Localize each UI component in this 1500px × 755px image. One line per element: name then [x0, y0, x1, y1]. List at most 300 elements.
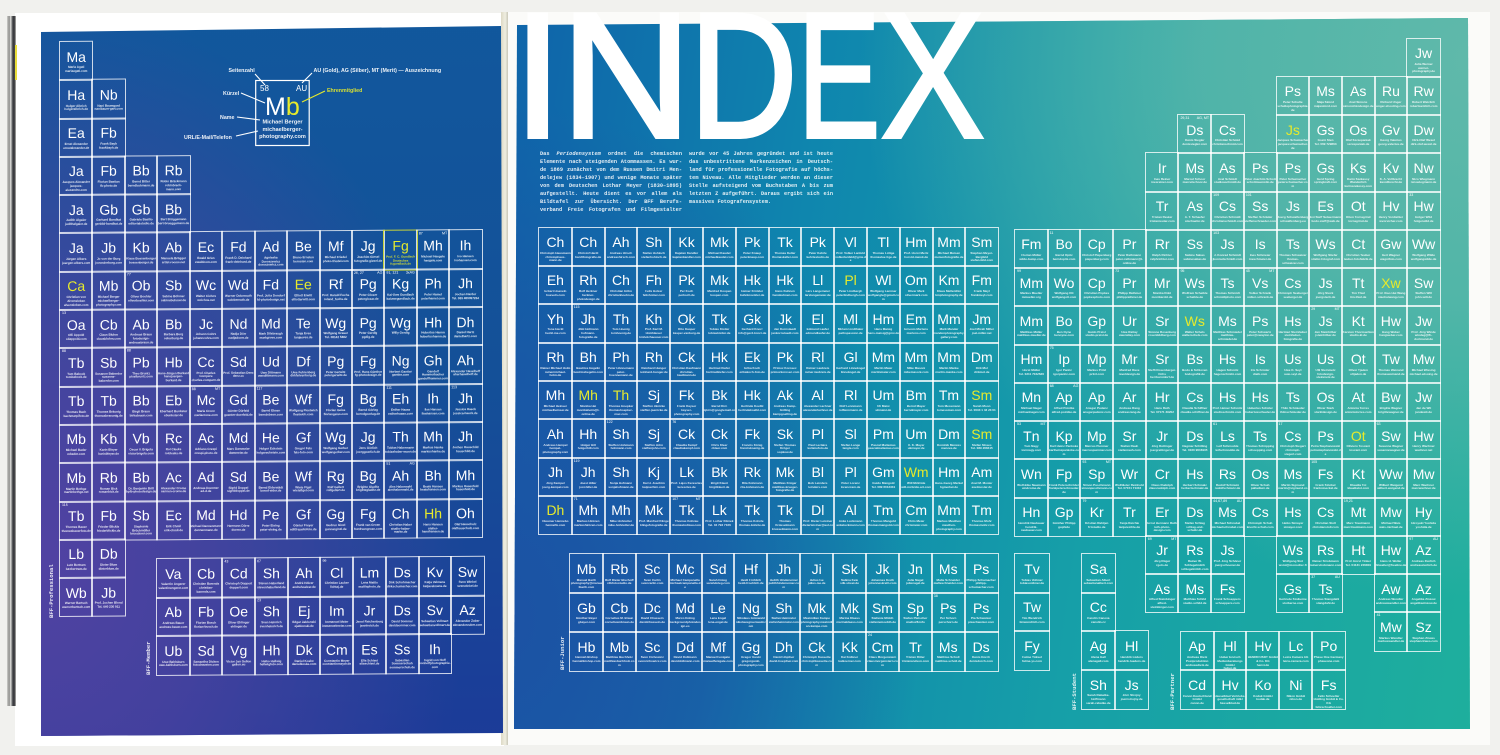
- panel: centre table: kmholzhaeuser.com: [639, 335, 668, 339]
- panel: right page table: Bo: [1055, 236, 1073, 252]
- panel: BFF-Professional table, left page: wdobernuth.de: [227, 298, 249, 302]
- panel: BFF-Professional table, left page: thomasbraeunig.de: [94, 413, 122, 418]
- panel: right page table: Peter Schulte: [1283, 100, 1303, 104]
- panel: BFF-Professional table, left page: Bernd Bitter: [132, 180, 149, 184]
- panel: centre table: Joel Micah Miller: [970, 327, 994, 331]
- legend: how to read a cell: URL/E-Mail/Telefon: [184, 135, 232, 141]
- panel: BFF-Professional table, left page: Ah: [392, 467, 409, 483]
- panel: centre table: joel-miller.net: [972, 331, 992, 335]
- panel: right page table: joergrettinger.de: [1150, 448, 1174, 452]
- panel: centre table: 122: [607, 420, 613, 424]
- panel: BFF-Member table: Ds: [393, 564, 410, 580]
- panel: BFF-Professional table, left page: Jh: [458, 275, 472, 292]
- panel: BFF-Professional table, left page: oliverboehler.com: [128, 298, 154, 302]
- panel: BFF-Member table: Daniel Koske: [294, 659, 313, 663]
- panel: BFF-Professional table, left page: Hans Hansen: [423, 522, 442, 526]
- panel: right page table: Sr: [1122, 428, 1136, 444]
- panel: BFF-Member table: 23: [257, 598, 261, 602]
- panel: centre table: Thomas Koltzau: [675, 519, 698, 523]
- panel: BFF-Professional table, left page: Rb: [164, 163, 182, 179]
- panel: centre table: 107: [672, 497, 678, 501]
- panel: centre table: Wolfgang Lammer: [870, 289, 897, 293]
- panel: right page table: Rainer Strobmann: [1312, 559, 1339, 563]
- panel: BFF-Member table: fotodrausten.com: [193, 663, 219, 667]
- panel: BFF-Professional table, left page: doroszewicz.com: [258, 263, 283, 267]
- panel: right page table: yoshida.de: [1416, 525, 1432, 529]
- panel: BFF-Junior table: Sh: [775, 600, 792, 616]
- legend: how to read a cell: 58: [260, 84, 269, 93]
- panel: BFF-Professional table, left page: charles-compere.de: [191, 378, 220, 382]
- panel: BFF-Member table: 99: [322, 559, 326, 563]
- panel: right page table: Volker Schrank: [1249, 291, 1271, 295]
- panel: BFF-Professional table, left page: Bg: [359, 468, 376, 484]
- panel: right page table: Iris Schröder: [1251, 368, 1270, 372]
- panel: BFF-Member table: Immanuel Meier: [325, 620, 348, 624]
- panel: right page table: Vs: [1252, 274, 1268, 290]
- cell: Js honorary member: Js: [1286, 122, 1300, 138]
- panel: BFF-Professional table, left page: jovonderburg.com: [95, 260, 122, 264]
- panel: right page table: wvorsicher.com: [1379, 219, 1402, 223]
- panel: right page table: 97: [1409, 537, 1413, 541]
- panel: right page table: jkonradschmidt.com: [1213, 257, 1242, 261]
- panel: BFF-Professional table, left page: rolfgellert.de: [326, 488, 344, 492]
- panel: right page table: Ru: [1382, 83, 1400, 99]
- panel: right page table: Cs: [1219, 122, 1236, 138]
- panel: right page table: petrastephanowski.de: [1310, 448, 1341, 456]
- yellow edge tab: [15, 45, 17, 80]
- panel: right page table: Christoph Seeberger: [1278, 291, 1308, 295]
- panel: centre table: holgerhill.com: [578, 446, 599, 450]
- panel: right page table: Fs: [1318, 466, 1333, 482]
- panel: right page table: 93: [1082, 460, 1086, 464]
- panel: centre table: Thomas Mangold: [871, 519, 896, 523]
- cell: Ca honorary member: [59, 270, 93, 311]
- panel: centre table: Jh: [581, 464, 596, 480]
- panel: BFF-Junior table: Philipp Schumacher: [966, 578, 996, 582]
- panel: right page table: dieib.com: [1253, 372, 1267, 376]
- panel: BFF-Member table: Lena Mattis: [361, 581, 378, 585]
- panel: centre table: lorenzcam.de: [841, 485, 860, 489]
- panel: centre table: 76: [672, 420, 676, 424]
- panel: BFF-Junior table: Christoph Kassette: [803, 655, 831, 659]
- panel: centre table: Klaus Mellenthin: [937, 289, 961, 293]
- panel: BFF-Professional table, left page: Rb: [99, 469, 117, 485]
- panel: centre table: Sl: [844, 426, 857, 442]
- panel: centre table: jankornstaedt.com: [771, 331, 799, 335]
- panel: right page table: Wo: [1054, 274, 1074, 290]
- panel: centre table: Thomas Lüttge: [872, 251, 894, 255]
- panel: BFF-Professional table, left page: 87: [418, 232, 422, 236]
- panel: right page table: stiefer-fotograf.com: [1311, 257, 1340, 261]
- panel: right page table: claudia-schiffner.de: [1180, 410, 1209, 414]
- panel: BFF-Junior table: Mk: [807, 600, 826, 616]
- panel: BFF-Student table: Sa: [1090, 561, 1107, 577]
- panel: right page table: andreaswendler.com: [1376, 601, 1406, 605]
- panel: BFF-Professional table, left page: Ja: [68, 163, 83, 179]
- panel: right page table: Ot: [1351, 351, 1366, 367]
- panel: BFF-Partner table: henvi.de: [1257, 663, 1269, 667]
- panel: BFF-Professional table, left page: Theo Bruntz: [132, 371, 149, 375]
- panel: BFF-Professional table, left page: Wg: [325, 429, 346, 446]
- panel: right page table: tornagrind.de: [1348, 219, 1368, 223]
- panel: BFF-Professional table, left page: Ec: [197, 239, 214, 255]
- panel: BFF-Member table: Florian Busch: [196, 621, 216, 625]
- panel: BFF-Junior table: Maximilian Kampe: [803, 616, 830, 620]
- panel: BFF-Professional table, left page: juergen-albers.com: [62, 260, 90, 265]
- panel: centre table: Gk: [743, 311, 761, 327]
- panel: centre table: erikakoch-foto.de: [739, 370, 765, 374]
- panel: right page table: marctrautmann.com: [1344, 525, 1373, 529]
- legend: how to read a cell: Kürzel: [223, 91, 240, 97]
- panel: BFF-Professional table, left page: wolfgangerber.com: [321, 450, 349, 454]
- intro text: column two: massives Fotografensystem.: [689, 199, 771, 205]
- panel: right page table: Igor Panitz: [1056, 368, 1072, 372]
- panel: BFF-Professional table, left page: Frank van Groen: [356, 523, 380, 527]
- panel: right page table: walterschels.com: [1182, 333, 1207, 337]
- panel: right page table: MT: [1335, 307, 1340, 311]
- panel: right page table: georg-valerius.de: [1378, 142, 1404, 146]
- panel: centre table: Dm: [938, 426, 960, 442]
- panel: BFF-Professional table, left page: markgrove.com: [259, 336, 282, 340]
- panel: BFF-Junior table: Ck: [808, 639, 825, 655]
- panel: BFF-Professional table, left page: Wd: [227, 277, 248, 293]
- cell: Ma: mariaagati.com: [65, 69, 87, 73]
- panel: right page table: Goetz Sten: [1318, 138, 1333, 142]
- panel: BFF-Professional table, left page: Prof. Sebastian Denz: [223, 370, 253, 375]
- intro text: column one: verband Freie Fotografen und Filmgestalter: [540, 207, 682, 213]
- panel: right page table: Ds: [1186, 122, 1203, 138]
- panel: BFF-Junior table: perschorn.de: [939, 620, 958, 624]
- panel: small left column table: fatme-ys.com: [1022, 659, 1042, 663]
- panel: BFF-Junior table: Matthias Buchholz: [606, 655, 633, 659]
- panel: centre table: Hm: [905, 234, 927, 250]
- panel: right page table: Cr: [1155, 466, 1169, 482]
- panel: BFF-Professional table, left page: Rg: [326, 468, 344, 484]
- panel: BFF-Professional table, left page: Ad: [262, 238, 279, 255]
- panel: BFF-Junior table: gregorguski-photography.com: [738, 659, 764, 667]
- panel: centre table: Mh: [578, 387, 598, 403]
- panel: BFF-Member table: Katja Velmans: [424, 580, 445, 584]
- panel: right page table: Peter Schumacher: [1279, 177, 1306, 181]
- page: left white sheet: [15, 13, 504, 746]
- panel: centre table: Peter Kehrle: [809, 251, 827, 255]
- panel: right page table: Ws: [1185, 313, 1205, 329]
- panel: centre table: Bk: [711, 387, 728, 403]
- panel: right page table: AU: [1433, 537, 1438, 541]
- panel: BFF-Professional table, left page: judithalgaier.de: [65, 222, 87, 226]
- panel: BFF-Partner table: Hv: [1221, 677, 1239, 693]
- label: BFF-Partner: BFF-Partner: [1169, 673, 1176, 710]
- panel: BFF-Partner table: Cd: [1188, 677, 1206, 693]
- panel: BFF-Professional table, left page: Prof. Hans Günther: [354, 369, 382, 374]
- label: BFF-Junior: BFF-Junior: [559, 636, 566, 670]
- panel: right page table: Karin Székessy: [1347, 177, 1369, 181]
- panel: right page table: angelikazinzow.de: [1410, 601, 1437, 605]
- panel: right page table: Stefan Schlag: [1185, 521, 1205, 525]
- panel: right page table: Wolfgang Stol: [1283, 559, 1303, 563]
- panel: BFF-Partner table: Po: [1320, 638, 1337, 654]
- panel: BFF-Professional table, left page: Ab: [164, 239, 182, 255]
- panel: right page table: Hw: [1413, 198, 1434, 214]
- panel: centre table: Hm: [938, 464, 960, 480]
- panel: centre table: hgmerkel.de: [940, 485, 958, 489]
- panel: BFF-Professional table, left page: photo-friedel.com: [322, 259, 348, 263]
- panel: right page table: 44,67,89: [1213, 498, 1227, 502]
- legend: how to read a cell: Michael Berger: [262, 120, 303, 126]
- panel: centre table: Mk: [710, 272, 729, 288]
- panel: centre table: ulimaisi.de: [875, 408, 891, 412]
- panel: right page table: Tom Nagy: [1024, 444, 1039, 448]
- panel: right page table: szczepaniak.de: [1347, 142, 1369, 146]
- panel: right page table: Prof. Heiner Schmitz: [1213, 406, 1242, 410]
- panel: BFF-Professional table, left page: Michael Haegele: [421, 254, 444, 258]
- panel: BFF-Professional table, left page: hauschild.de: [456, 449, 474, 453]
- panel: BFF-Professional table, left page: 117: [256, 386, 262, 390]
- panel: BFF-Member table: [156, 556, 485, 676]
- panel: centre table: Rk: [744, 464, 761, 480]
- panel: centre table: Andreas Hempel: [543, 443, 567, 447]
- panel: BFF-Professional table, left page: 115: [62, 503, 67, 507]
- panel: right page table: Steffen Schräder: [1248, 215, 1272, 219]
- panel: right page table: 29: [1311, 307, 1315, 311]
- panel: right page table: Sp: [1088, 466, 1105, 482]
- panel: right page table: Dagmar Schilling: [1182, 444, 1207, 448]
- panel: right page table: tomnagy.com: [1022, 448, 1041, 452]
- panel: BFF-Professional table, left page: ivohansen.com: [454, 258, 476, 262]
- panel: BFF-Professional table, left page: berndgoerlag.de: [356, 412, 380, 416]
- panel: BFF-Junior table: Judith Hinderunner: [770, 578, 798, 582]
- panel: centre table: Christoph Hausmann: [540, 251, 571, 255]
- panel: centre table: Stefan Moses: [972, 443, 992, 447]
- panel: right page table: frankstoeckel.de: [1314, 486, 1338, 490]
- panel: BFF-Professional table, left page: Ac: [197, 430, 214, 447]
- panel: right page table: matthias-mueller.de: [1017, 333, 1046, 337]
- panel: BFF-Professional table, left page: Ob: [131, 278, 150, 294]
- panel: right page table: Cs: [1186, 389, 1203, 405]
- panel: right page table: Walter Schels: [1185, 330, 1205, 334]
- panel: centre table: Mm: [937, 349, 961, 365]
- panel: right page table: Mm: [1020, 313, 1043, 329]
- panel: right page table: Claus Rudolph: [1151, 483, 1173, 487]
- panel: BFF-Member table: Ej: [298, 603, 310, 619]
- panel: centre table: hoeveln.com: [546, 293, 565, 297]
- panel: BFF-Junior table: Mb: [577, 561, 596, 577]
- panel: BFF-Professional table, left page: fd-photodesign.net: [257, 297, 284, 301]
- panel: right page table: majasimnd.com: [1314, 104, 1337, 108]
- panel: centre table: larslangemeier.de: [805, 293, 831, 297]
- panel: centre table: Bh: [580, 349, 597, 365]
- panel: centre table: Ek: [744, 349, 760, 365]
- panel: centre table: koopen.com: [710, 293, 728, 297]
- panel: right page table: Tw: [1382, 351, 1400, 367]
- panel: right page table: Bw: [1381, 389, 1401, 405]
- panel: centre table: edmundlaufer.de: [806, 331, 830, 335]
- panel: BFF-Professional table, left page: Manuela Brügger: [161, 256, 185, 260]
- panel: BFF-Professional table, left page: Markus Hasenfeld: [452, 484, 478, 488]
- panel: centre table: Kj: [648, 464, 660, 480]
- panel: right page table: bodografik.de: [1185, 372, 1205, 376]
- panel: right page table: Rs: [1317, 542, 1334, 558]
- panel: centre table: monikaheim@t-online.de: [577, 408, 600, 416]
- panel: BFF-Professional table, left page: Ch: [391, 506, 409, 522]
- panel: centre table: Ah: [612, 234, 630, 250]
- panel: centre table: Jörg Kempel: [546, 481, 565, 485]
- panel: BFF-Professional table, left page: holgeralbrich.de: [64, 107, 88, 111]
- panel: BFF-Student table: Hendrik Lüders: [1120, 655, 1143, 659]
- panel: centre table: Felix Holzer: [645, 289, 662, 293]
- panel: right page table: Andreas Wendler: [1378, 597, 1403, 601]
- panel: BFF-Junior table: manuelfenigate.com: [703, 659, 733, 663]
- panel: right page table: MT: [1106, 460, 1111, 464]
- panel: right page table: Prof. Jörg Schöner: [1214, 559, 1241, 563]
- panel: right page table: Kristian Rahtjen: [1085, 521, 1108, 525]
- panel: BFF-Professional table, left page: Maria Crone: [197, 409, 214, 413]
- intro text: column one: Bildtafel zur Übersicht. Der BFF Berufs-: [540, 199, 682, 205]
- panel: centre table: Tone Heckl: [547, 327, 563, 331]
- panel: BFF-Junior table: Marco Doling: [675, 616, 695, 620]
- panel: BFF-Junior table: Ds: [973, 639, 990, 655]
- panel: right page table: Kt: [1352, 313, 1365, 329]
- panel: centre table: Per Koch: [680, 289, 693, 293]
- panel: BFF-Professional table, left page: Florian Geiss: [326, 408, 345, 412]
- panel: BFF-Professional table, left page: Tb: [68, 393, 84, 409]
- panel: right page table: oltjaden.de: [1350, 372, 1366, 376]
- panel: centre table: andreashirsch.com: [607, 255, 635, 259]
- panel: right page table: Mw: [1380, 504, 1402, 520]
- panel: BFF-Partner table: Felix Schoeller Holding GmbH & Co. KG: [1314, 694, 1344, 705]
- panel: right page table: Oliviero Toscani: [1346, 444, 1370, 448]
- panel: BFF-Professional table, left page: Sd: [229, 354, 246, 370]
- panel: BFF-Partner table: Hl: [1223, 638, 1237, 654]
- panel: BFF-Professional table, left page: Mc: [196, 392, 215, 408]
- panel: right page table: philipprathmer.de: [1117, 295, 1142, 299]
- panel: centre table: berndmayer.com: [904, 408, 928, 412]
- panel: small left column table: Tw: [1023, 599, 1041, 615]
- panel: centre table: Jh: [548, 464, 563, 480]
- panel: right page table: Jörg Rüger: [1154, 559, 1170, 563]
- panel: BFF-Professional table, left page: Bb: [132, 163, 149, 179]
- label: BFF-Professional: BFF-Professional: [48, 564, 55, 618]
- panel: right page table: Ts: [1286, 236, 1300, 252]
- panel: centre table: Fh: [646, 272, 662, 288]
- panel: centre table: Hans Maisig: [874, 327, 892, 331]
- title: INDEX: [513, 0, 984, 160]
- panel: centre table: Kai H. Joachim: [643, 481, 665, 485]
- panel: centre table: Dirk Mol: [976, 366, 988, 370]
- panel: right page table: rosenbildberg.com: [1148, 333, 1176, 337]
- panel: right page table: Ss: [1187, 236, 1203, 252]
- panel: right page table: 99: [1017, 269, 1021, 273]
- panel: small left column table: Tim Wendrich: [1022, 616, 1042, 620]
- panel: BFF-Professional table, left page: brueckner.com: [130, 532, 151, 536]
- panel: BFF-Professional table, left page: Wg: [325, 315, 346, 331]
- panel: centre table: Wl: [875, 272, 892, 288]
- panel: centre table: Km: [938, 272, 959, 288]
- panel: BFF-Professional table, left page: roland_fuchs.de: [323, 297, 347, 301]
- panel: BFF-Junior table: David Höpfner: [773, 655, 794, 659]
- panel: BFF-Partner table: [1180, 631, 1346, 710]
- panel: right page table: Georg Valerius: [1380, 138, 1402, 142]
- panel: centre table: Markus Hintzen: [577, 519, 599, 523]
- panel: BFF-Professional table, left page: kaiuwegundlach.de: [386, 296, 414, 301]
- panel: right page table: 109: [1213, 192, 1219, 196]
- panel: BFF-Junior table: piaschweizer.com: [968, 620, 994, 624]
- panel: centre table: Pk: [678, 272, 695, 288]
- panel: centre table: olivermark.com: [905, 293, 927, 297]
- panel: BFF-Professional table, left page: 113: [451, 385, 456, 389]
- panel: right page table: Nw: [1413, 160, 1434, 176]
- panel: centre table: thomashoepker-mac.com: [609, 408, 633, 416]
- panel: BFF-Professional table, left page: Db: [99, 546, 117, 562]
- panel: centre table: Bl: [812, 464, 824, 480]
- panel: right page table: 101: [1246, 192, 1252, 196]
- panel: right page table: Matthias Schmiedel: [1213, 330, 1242, 334]
- panel: right page table: schultephotographie.de: [1277, 104, 1308, 112]
- legend: how to read a cell: Mb: [265, 93, 300, 121]
- panel: BFF-Professional table, left page: Ja: [68, 202, 83, 218]
- panel: BFF-Professional table, left page: [59, 40, 483, 617]
- panel: BFF-Professional table, left page: gantier.com: [392, 373, 409, 377]
- panel: small left column table: Fatme Yüksel: [1022, 655, 1042, 659]
- panel: right page table: Michael Wais: [1381, 521, 1400, 525]
- panel: BFF-Professional table, left page: Oscar V. Brigola: [129, 448, 152, 452]
- panel: BFF-Junior table: Rb: [610, 561, 628, 577]
- legend: how to read a cell: AU: [296, 84, 307, 93]
- panel: BFF-Professional table, left page: fels-foto.com: [293, 450, 312, 454]
- panel: BFF-Professional table, left page: Norbert Gantier: [389, 369, 411, 373]
- panel: right page table: Ben Oyne: [1057, 330, 1071, 334]
- panel: centre table: Thomas Keller: [774, 251, 795, 255]
- panel: right page table: simonpuschmann.com: [1081, 486, 1112, 494]
- panel: right page table: Kt: [1352, 466, 1365, 482]
- panel: BFF-Member table: Heiko Hellwig: [261, 659, 281, 663]
- panel: right page table: Js: [1319, 313, 1333, 329]
- panel: BFF-Member table: valentinangerer.com: [158, 586, 188, 590]
- panel: BFF-Junior table: 24: [868, 633, 872, 637]
- panel: right page table: Axel Simons: [1349, 100, 1367, 104]
- panel: centre table: chrismeier.com: [905, 523, 927, 527]
- panel: centre table: Michael Kaudel: [708, 251, 730, 255]
- panel: right page table: karlheinzpankoke.com: [1049, 448, 1079, 456]
- panel: centre table: Tel. 089 6013331: [872, 485, 895, 489]
- panel: centre table: matthias-krueger-fotografie.de: [772, 485, 798, 492]
- panel: right page table: Angelika Zinzow: [1412, 597, 1436, 601]
- panel: centre table: Miriam Lindthaler: [838, 327, 863, 331]
- panel: centre table: Lk: [712, 502, 727, 518]
- panel: BFF-Professional table, left page: martinbethge.net: [63, 490, 88, 494]
- panel: centre table: Sh: [612, 426, 630, 442]
- panel: centre table: 119: [574, 459, 580, 463]
- panel: BFF-Professional table, left page: Ea: [67, 125, 84, 141]
- panel: BFF-Professional table, left page: wietefigel.com: [292, 489, 313, 493]
- panel: right page table: fr1studio.de: [1088, 525, 1105, 529]
- panel: BFF-Member table: Sven Heinrich: [261, 620, 281, 624]
- panel: right page table: Az: [1415, 542, 1432, 558]
- panel: right page table: Tel. 07151 71316: [1118, 486, 1141, 490]
- panel: BFF-Junior table: photography@manuelbarth.com: [571, 581, 602, 589]
- panel: centre table: Tk: [777, 502, 793, 518]
- panel: centre table: Thomas Krüsselmann: [775, 519, 795, 527]
- panel: BFF-Professional table, left page: Kai-Uwe Gundlach: [387, 293, 414, 297]
- panel: BFF-Member table: André Hölzer: [294, 581, 313, 585]
- panel: BFF-Professional table, left page: Fb: [100, 508, 116, 524]
- panel: right page table: 33: [1409, 192, 1413, 196]
- panel: right page table: rgelo.de: [1156, 563, 1168, 567]
- panel: centre table: Paul Leclaire: [808, 443, 827, 447]
- panel: right page table: 37: [1311, 575, 1315, 579]
- panel: centre table: Lars Langemeier: [806, 289, 830, 293]
- panel: BFF-Professional table, left page: clausbluhm.com: [96, 337, 120, 341]
